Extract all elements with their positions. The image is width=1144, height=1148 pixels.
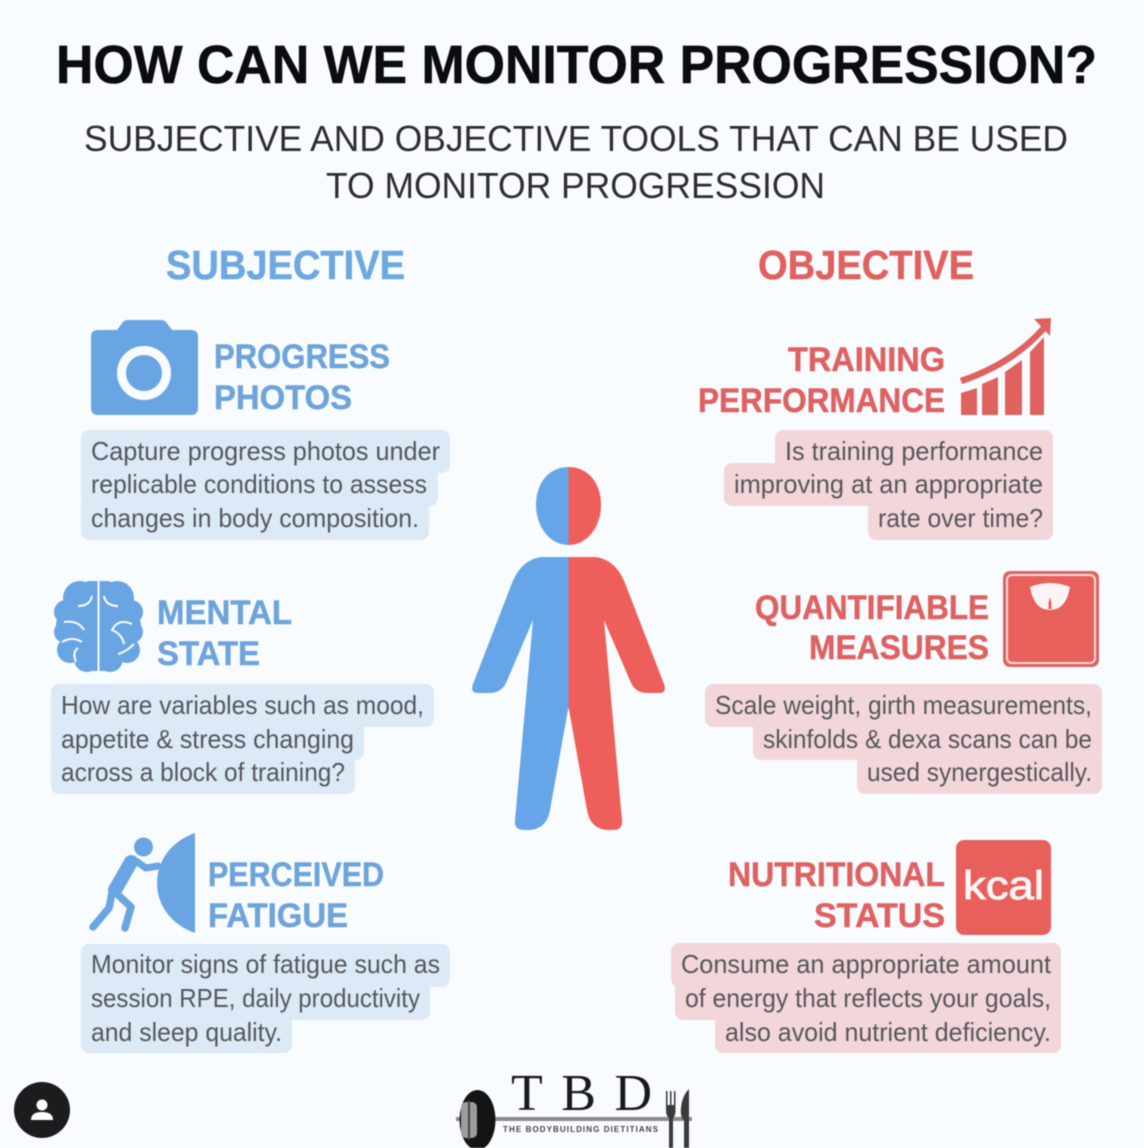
heading: quantifiable measures	[755, 589, 989, 667]
central figure: half blue half red	[472, 467, 665, 830]
text block: mental state: across a block of training?	[61, 757, 345, 787]
text block: perceived fatigue: and sleep quality.	[91, 1017, 282, 1047]
text block: perceived fatigue: Monitor signs of fatigue such as	[91, 949, 440, 979]
text block: mental state	[51, 684, 434, 794]
text block: quantifiable measures: Scale weight, girth measurements,	[715, 690, 1092, 720]
heading: progress photos: PROGRESS	[214, 338, 390, 376]
icon: rising bar chart with arrow	[961, 318, 1051, 415]
title: HOW CAN WE MONITOR PROGRESSION?	[56, 35, 1097, 95]
text block: mental state: appetite & stress changing	[61, 724, 354, 754]
logo barbell	[456, 1090, 692, 1148]
heading: nutritional status	[728, 856, 945, 935]
subtitle: SUBJECTIVE AND OBJECTIVE TOOLS THAT CAN BE USED	[84, 118, 1068, 159]
text block: mental state: How are variables such as mood,	[61, 690, 424, 720]
text block: nutritional status	[671, 943, 1061, 1053]
icon: person pushing boulder	[93, 833, 195, 933]
text block: nutritional status: also avoid nutrient deficiency.	[725, 1017, 1051, 1047]
icon: brain	[54, 580, 143, 672]
text block: progress photos: changes in body composition.	[91, 503, 419, 533]
heading: nutritional status: STATUS	[814, 897, 945, 935]
text block: progress photos: Capture progress photos under	[91, 436, 440, 466]
heading: subjective: SUBJECTIVE	[166, 242, 405, 288]
logo: the bodybuilding dietitians	[456, 1065, 692, 1148]
icon: profile avatar badge	[14, 1082, 70, 1138]
panel: quantifiable measures	[705, 571, 1102, 794]
heading: mental state: STATE	[157, 635, 260, 673]
subtitle	[84, 118, 1068, 206]
figure: blue half	[472, 467, 568, 830]
subtitle: TO MONITOR PROGRESSION	[326, 165, 825, 206]
icon: weighing scale	[1003, 571, 1099, 667]
text block: nutritional status: of energy that reflects your goals,	[685, 983, 1051, 1013]
figure: red half	[568, 467, 665, 830]
panel: mental state	[51, 580, 434, 794]
logo tagline: THE BODYBUILDING DIETITIANS	[503, 1125, 659, 1134]
heading: progress photos	[214, 338, 390, 417]
panel: perceived fatigue	[81, 833, 450, 1053]
heading: quantifiable measures: MEASURES	[809, 629, 989, 667]
heading: mental state	[157, 594, 292, 673]
text block: perceived fatigue	[81, 944, 450, 1053]
text block: quantifiable measures: skinfolds & dexa scans can be	[763, 724, 1092, 754]
heading: objective: OBJECTIVE	[758, 242, 974, 288]
heading: perceived fatigue: FATIGUE	[208, 897, 348, 935]
heading: quantifiable measures: QUANTIFIABLE	[755, 589, 989, 627]
icon: kcal badge	[956, 840, 1051, 935]
panel: progress photos	[81, 320, 450, 540]
text block: progress photos: replicable conditions to assess	[91, 469, 427, 499]
logo letters: TBD	[511, 1065, 652, 1122]
heading: mental state: MENTAL	[157, 594, 292, 632]
logo fork and knife	[666, 1089, 689, 1148]
text block: training performance	[724, 430, 1053, 540]
heading: progress photos: PHOTOS	[214, 379, 352, 417]
text block: nutritional status: Consume an appropriate amount	[681, 949, 1052, 979]
panel: training performance	[698, 318, 1053, 540]
text block: training performance: Is training performance	[785, 436, 1043, 466]
icon: kcal badge: kcal	[963, 864, 1044, 908]
text block: training performance: rate over time?	[878, 503, 1043, 533]
heading: nutritional status: NUTRITIONAL	[728, 856, 945, 894]
heading: training performance	[698, 341, 945, 420]
text block: progress photos	[81, 430, 450, 540]
text block: perceived fatigue: session RPE, daily productivity	[91, 983, 420, 1013]
text block: training performance: improving at an appropriate	[734, 469, 1043, 499]
panel: nutritional status	[671, 840, 1061, 1053]
icon: camera	[91, 320, 198, 415]
heading: perceived fatigue	[208, 856, 384, 935]
text block: quantifiable measures	[705, 684, 1102, 794]
heading: training performance: PERFORMANCE	[698, 382, 945, 420]
heading: perceived fatigue: PERCEIVED	[208, 856, 384, 894]
text block: quantifiable measures: used synergestically.	[867, 757, 1092, 787]
heading: training performance: TRAINING	[788, 341, 945, 379]
